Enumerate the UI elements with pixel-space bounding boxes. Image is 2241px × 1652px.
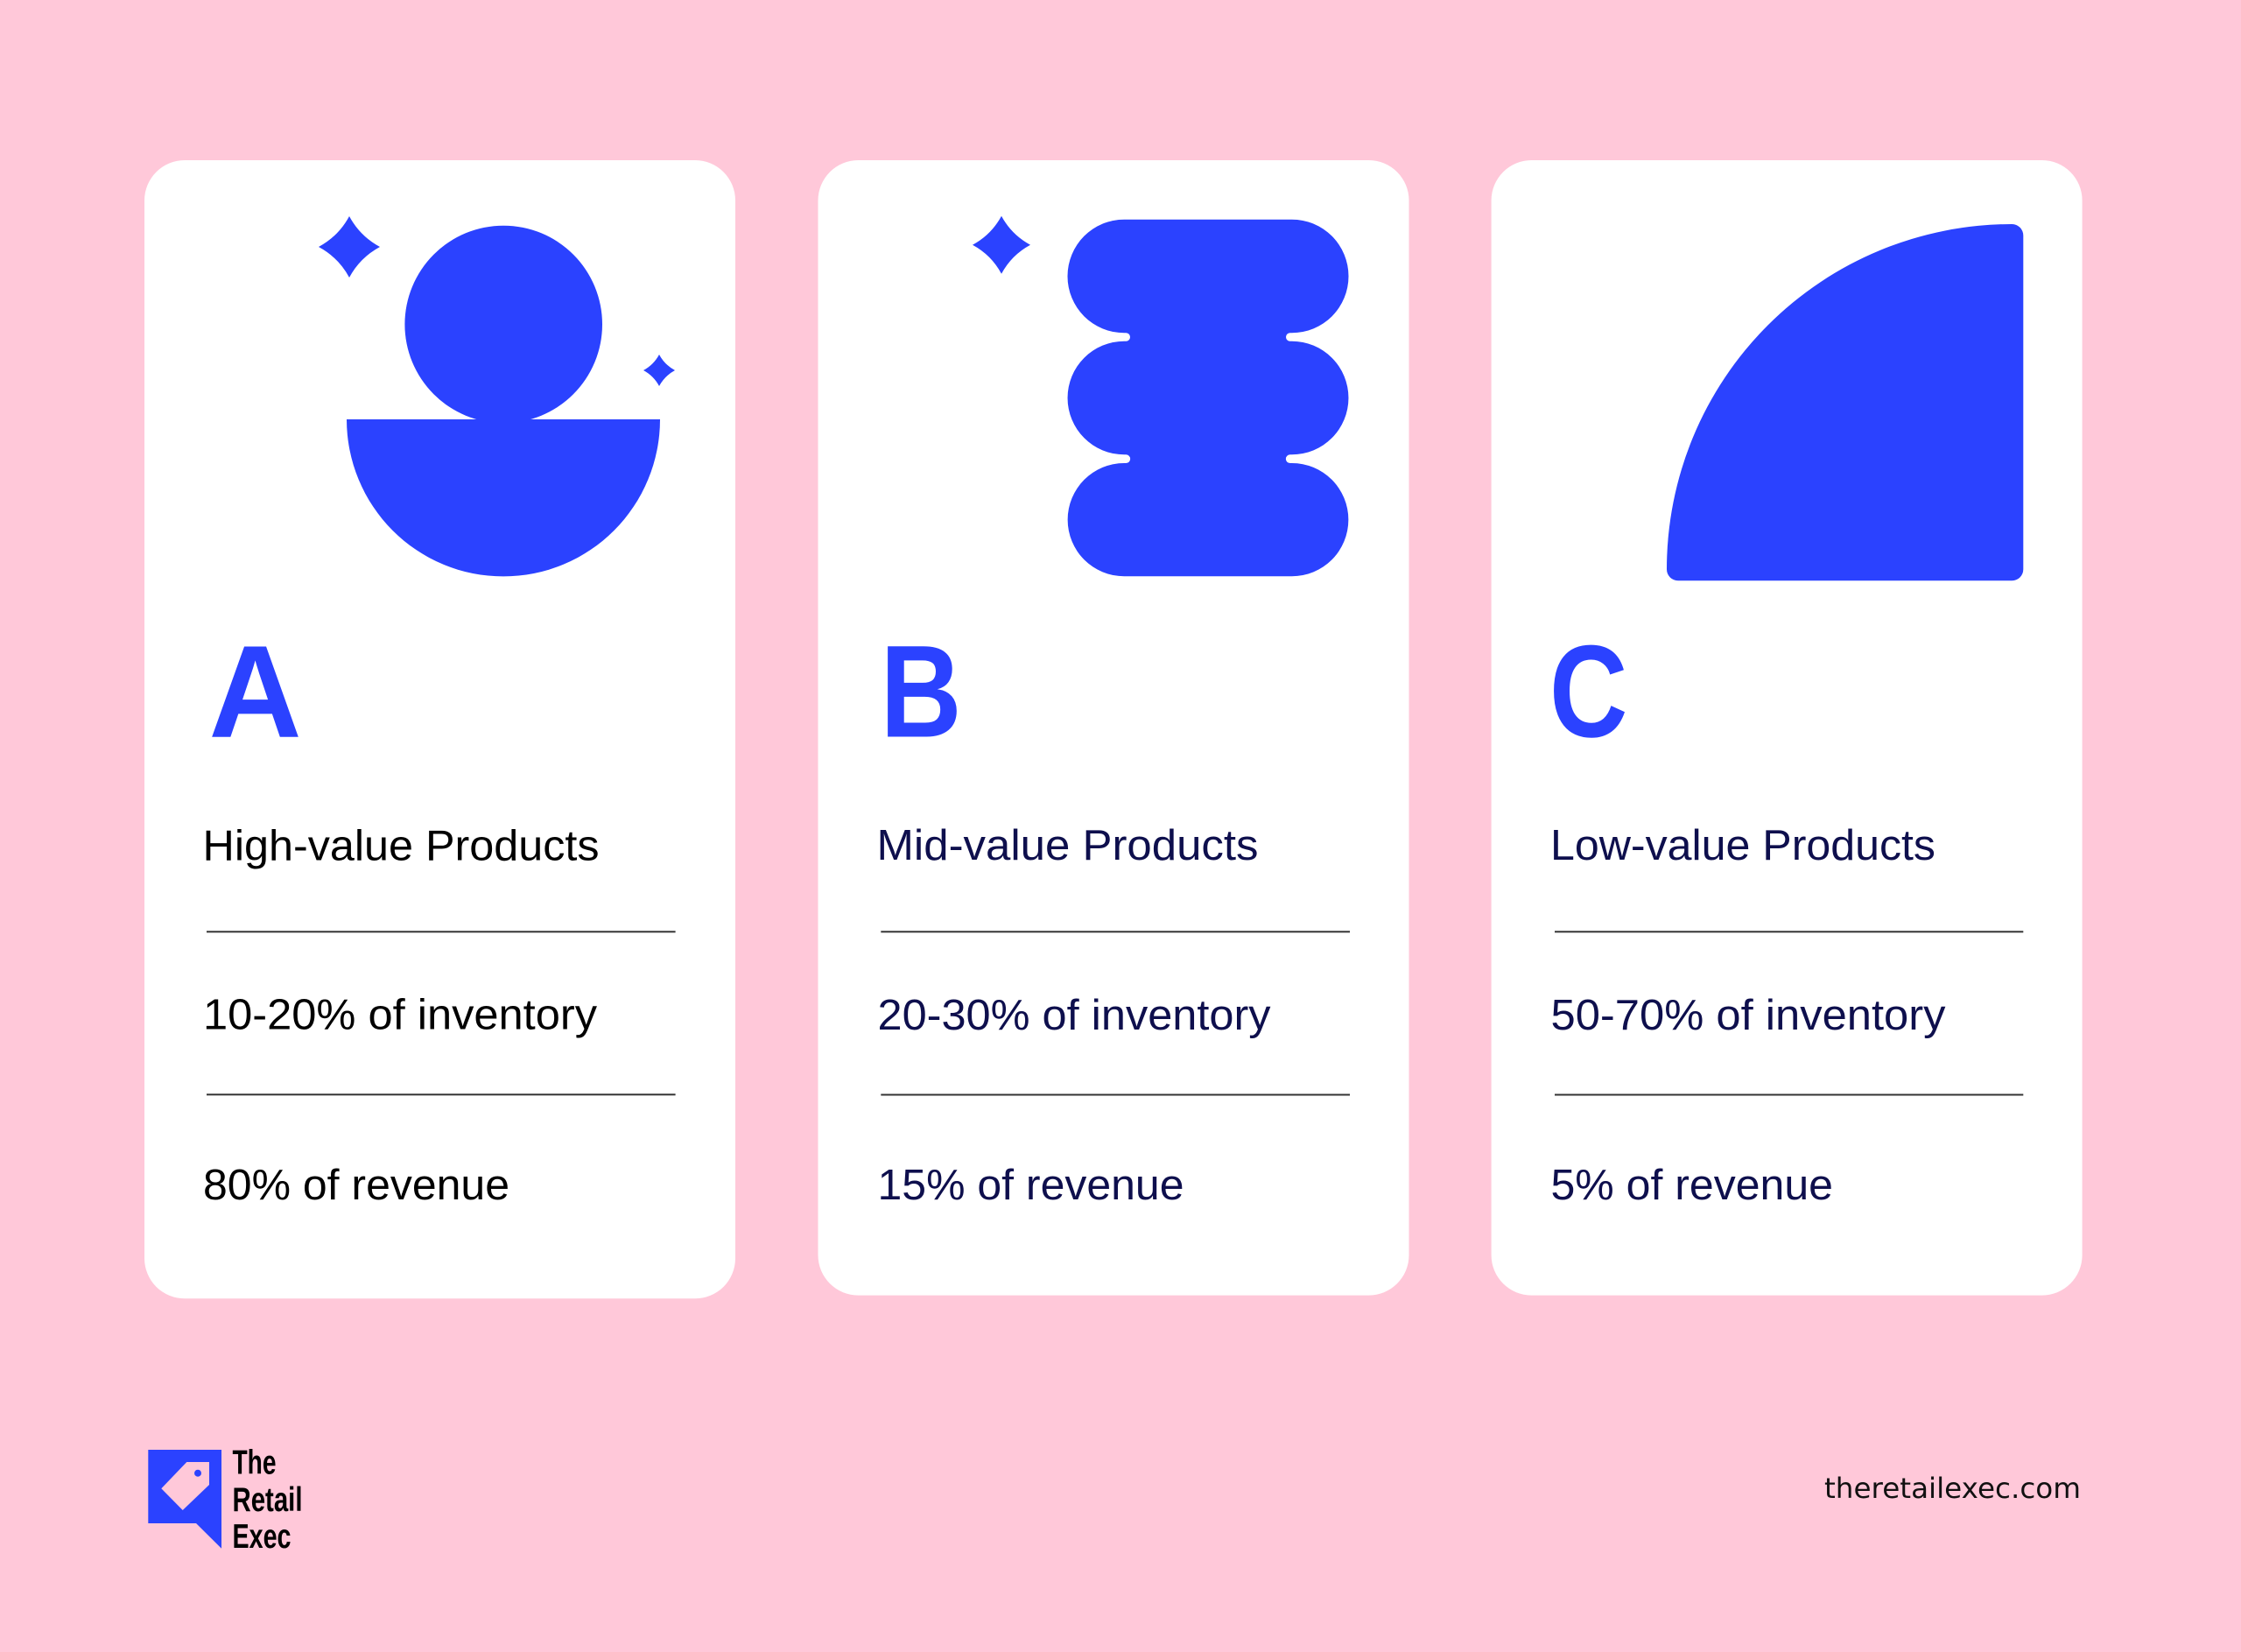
logo: The Retail Exec — [148, 1444, 303, 1556]
letter A: A — [208, 619, 302, 765]
text: High-value Products: High-value Products — [203, 822, 599, 869]
icon: circle over bowl with sparkles — [319, 216, 675, 576]
text: 10-20% of inventory: 10-20% of inventory — [203, 992, 598, 1039]
website url: theretailexec.com — [1824, 1472, 2081, 1505]
text: 15% of revenue: 15% of revenue — [877, 1162, 1184, 1209]
text: Mid-value Products: Mid-value Products — [877, 822, 1259, 869]
text: 80% of revenue: 80% of revenue — [203, 1162, 509, 1209]
text: 5% of revenue: 5% of revenue — [1551, 1162, 1833, 1209]
logo wordmark — [233, 1444, 303, 1556]
icon: quarter circle — [1667, 224, 2023, 580]
logo wordmark: The — [233, 1444, 277, 1481]
panel: class A — [144, 160, 735, 1298]
icon: stacked lobes with sparkle — [973, 216, 1348, 576]
letter B: B — [881, 617, 962, 765]
logo wordmark: Retail — [233, 1481, 303, 1519]
text: 20-30% of inventory: 20-30% of inventory — [877, 992, 1271, 1039]
letter C: C — [1549, 619, 1627, 765]
panel: class C — [1492, 160, 2083, 1296]
text: Low-value Products: Low-value Products — [1550, 822, 1935, 869]
text: 50-70% of inventory: 50-70% of inventory — [1551, 992, 1946, 1039]
icon: price tag speech bubble — [148, 1450, 221, 1549]
panel: class B — [818, 160, 1409, 1296]
logo wordmark: Exec — [233, 1518, 291, 1556]
